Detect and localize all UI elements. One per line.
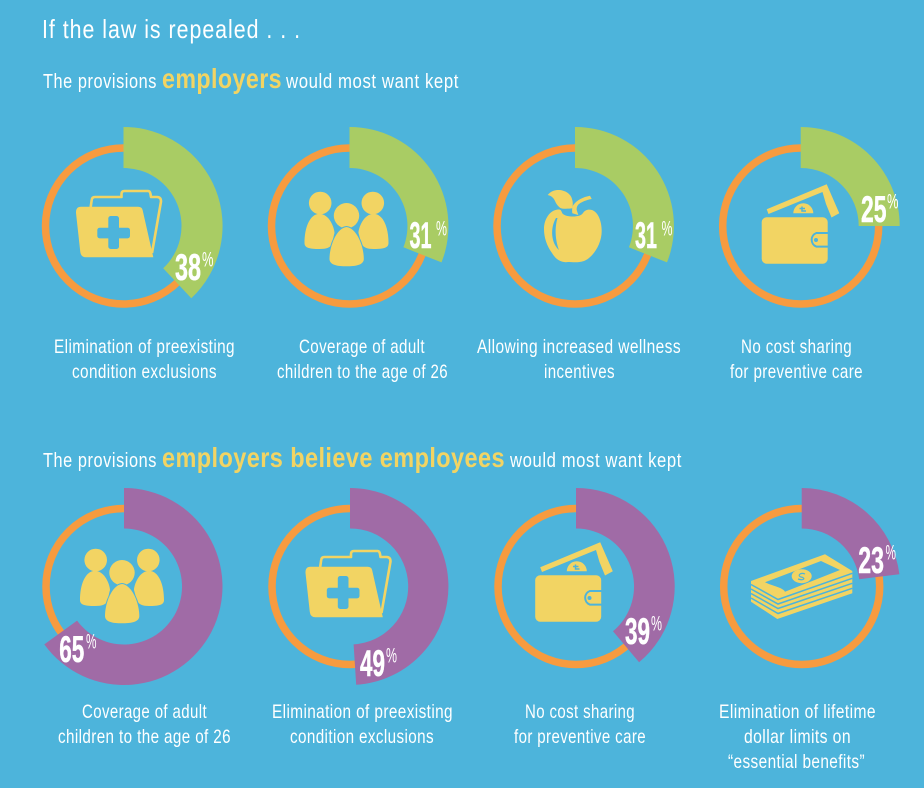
panel: adult children 65% bbox=[44, 488, 231, 748]
caption bbox=[272, 701, 453, 748]
heading: employers bbox=[43, 63, 459, 94]
caption: Elimination of preexisting bbox=[272, 701, 453, 723]
panel: adult children 31% bbox=[272, 127, 448, 383]
value 31%: % bbox=[662, 218, 672, 240]
icon: medical folder bbox=[305, 551, 390, 617]
value 39%: % bbox=[651, 612, 662, 636]
heading: employers believe employees: would most want kept bbox=[509, 450, 682, 472]
ring bbox=[724, 508, 880, 664]
ring bbox=[272, 148, 428, 304]
ring bbox=[272, 508, 428, 664]
panel: lifetime limits 23% bbox=[719, 488, 899, 773]
arc 31% bbox=[575, 127, 674, 262]
arc 65% bbox=[44, 488, 222, 685]
caption bbox=[730, 336, 863, 383]
caption bbox=[277, 336, 448, 383]
value 23%: % bbox=[886, 542, 896, 564]
value 25%: % bbox=[887, 190, 898, 214]
heading: employers believe employees: employers believe employees bbox=[162, 442, 505, 473]
icon: medical folder bbox=[76, 191, 161, 257]
value 65%: 65 bbox=[59, 629, 84, 670]
value 65%: % bbox=[86, 630, 96, 654]
ring bbox=[723, 148, 879, 304]
value 39%: 39 bbox=[625, 611, 650, 652]
icon: people bbox=[304, 192, 388, 266]
caption: Allowing increased wellness bbox=[477, 336, 681, 358]
value 49%: % bbox=[386, 644, 397, 668]
icon: wallet bbox=[535, 542, 613, 622]
caption: for preventive care bbox=[730, 361, 863, 383]
value 49%: 49 bbox=[360, 643, 385, 684]
icon: people bbox=[80, 549, 164, 623]
panel: wellness incentives 31% bbox=[477, 127, 681, 383]
caption bbox=[719, 701, 876, 773]
value 31%: 31 bbox=[410, 215, 432, 256]
panel: preexisting condition 38% bbox=[46, 127, 235, 383]
icon: stack of money bbox=[751, 554, 852, 619]
caption bbox=[58, 701, 231, 748]
caption bbox=[514, 701, 646, 748]
heading: employers: The provisions bbox=[43, 71, 157, 93]
value 31%: 31 bbox=[635, 215, 657, 256]
caption: “essential benefits” bbox=[728, 751, 865, 773]
arc 38% bbox=[124, 127, 223, 298]
value 38%: 38 bbox=[175, 247, 201, 288]
caption: dollar limits on bbox=[744, 726, 851, 748]
heading: employers: employers bbox=[162, 63, 282, 94]
caption: Coverage of adult bbox=[299, 336, 425, 358]
arc 49% bbox=[350, 488, 448, 685]
arc 39% bbox=[576, 488, 675, 662]
value 38%: % bbox=[202, 248, 214, 272]
caption: children to the age of 26 bbox=[277, 361, 448, 383]
ring bbox=[46, 148, 202, 304]
panel: preventive care 39% bbox=[498, 488, 675, 748]
ring bbox=[497, 148, 653, 304]
heading: employers believe employees bbox=[43, 442, 682, 473]
heading: employers: would most want kept bbox=[285, 71, 459, 93]
title: If the law is repealed . . . bbox=[42, 14, 301, 44]
caption bbox=[54, 336, 235, 383]
caption: condition exclusions bbox=[290, 726, 434, 748]
caption: Elimination of preexisting bbox=[54, 336, 235, 358]
ring bbox=[498, 508, 654, 664]
caption: No cost sharing bbox=[741, 336, 852, 358]
panel: preventive care 25% bbox=[723, 127, 900, 383]
arc 25% bbox=[801, 127, 900, 226]
ring bbox=[46, 508, 202, 664]
value 23%: 23 bbox=[858, 540, 884, 581]
caption: Elimination of lifetime bbox=[719, 701, 876, 723]
value 31%: % bbox=[436, 218, 447, 240]
arc 23% bbox=[802, 488, 899, 579]
arc 31% bbox=[350, 127, 448, 262]
caption: children to the age of 26 bbox=[58, 726, 231, 748]
caption: incentives bbox=[544, 361, 615, 383]
caption: No cost sharing bbox=[525, 701, 635, 723]
icon: apple bbox=[544, 190, 602, 262]
caption: for preventive care bbox=[514, 726, 646, 748]
caption bbox=[477, 336, 681, 383]
caption: condition exclusions bbox=[72, 361, 217, 383]
caption: Coverage of adult bbox=[82, 701, 207, 723]
heading: employers believe employees: The provisions bbox=[43, 450, 157, 472]
value 25%: 25 bbox=[861, 189, 886, 230]
panel: preexisting condition 49% bbox=[272, 488, 453, 748]
icon: wallet bbox=[762, 184, 839, 264]
